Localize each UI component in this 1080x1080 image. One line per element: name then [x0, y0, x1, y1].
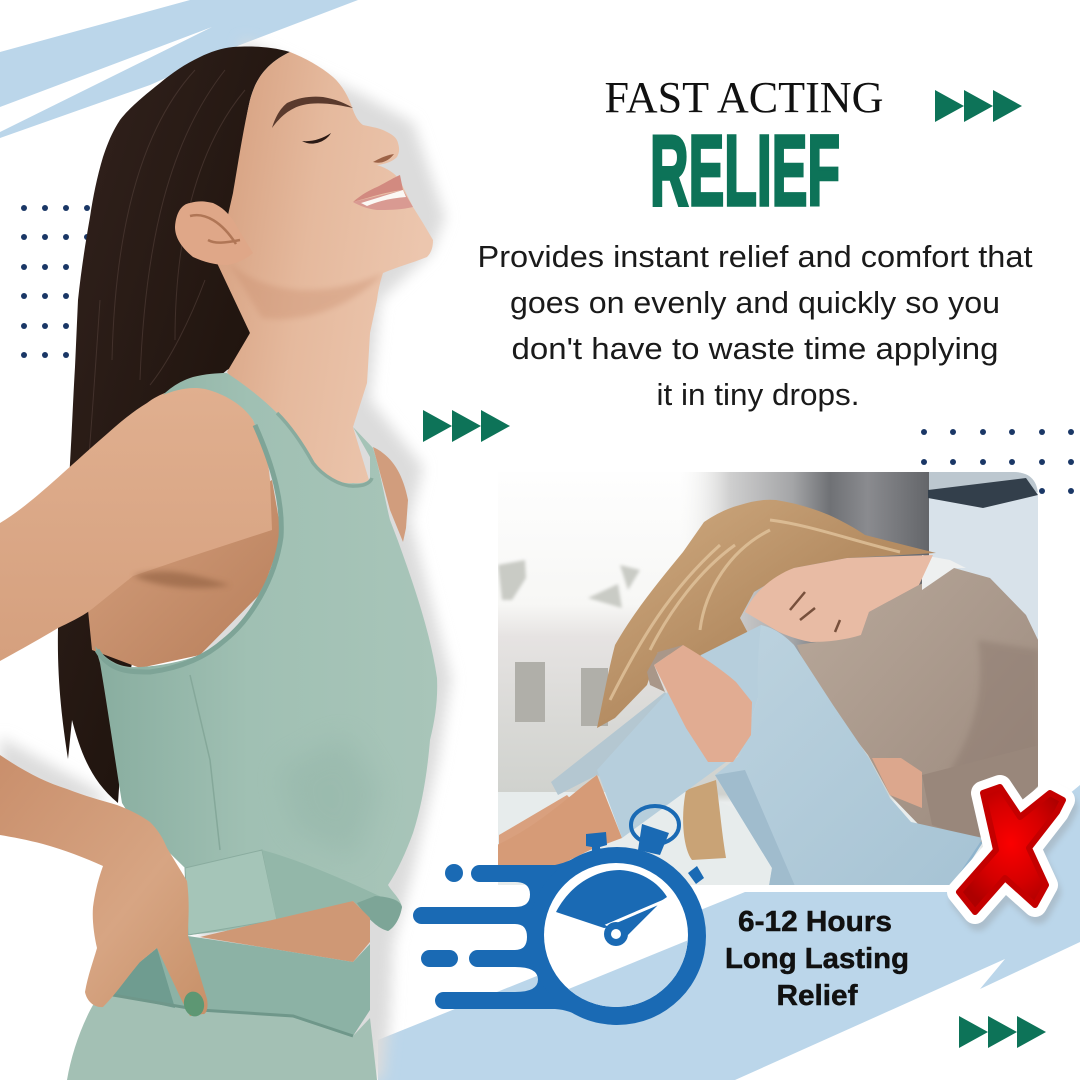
photo: woman with stomach pain	[497, 472, 1039, 890]
crown ring	[631, 806, 679, 844]
arrows: bottom	[959, 1016, 1046, 1048]
white collar	[922, 555, 966, 590]
face and neck	[217, 52, 433, 490]
window reflections	[515, 662, 608, 726]
hair tail between legs	[683, 780, 726, 860]
smiling woman in green tank top	[0, 40, 451, 1080]
waistband darker panel	[103, 948, 175, 1008]
armpit shadow	[133, 571, 230, 588]
tank knot	[357, 896, 402, 931]
ear fold	[190, 215, 240, 244]
neckline trim	[277, 413, 372, 486]
midriff	[200, 901, 370, 962]
background accent: top-left blue streak	[0, 0, 358, 138]
red X mark	[959, 787, 1066, 919]
tank fold	[262, 850, 388, 922]
right button	[688, 866, 704, 884]
speed lines	[413, 848, 620, 1025]
needle	[608, 901, 664, 937]
green nail	[182, 990, 206, 1018]
description text: Provides instant relief and comfort that	[478, 239, 1033, 274]
hair strands	[75, 70, 245, 600]
curtain	[698, 472, 929, 656]
closed eye and brow	[790, 592, 840, 632]
hair	[597, 500, 936, 728]
wall	[929, 472, 1038, 639]
nostril	[373, 154, 394, 163]
hub	[604, 922, 628, 946]
ear	[175, 201, 253, 265]
hair	[58, 47, 290, 803]
crown stem	[638, 824, 669, 855]
tank waist band	[185, 850, 277, 935]
neck and face	[745, 555, 933, 642]
description text: goes on evenly and quickly so you	[510, 285, 1000, 320]
left button	[586, 832, 607, 855]
torso skin	[88, 480, 282, 668]
far leg	[551, 692, 666, 795]
blue shirt under sweater	[958, 842, 982, 874]
dial	[544, 863, 688, 1007]
heading: FAST ACTING: FAST ACTING	[604, 73, 884, 122]
hand on knee	[654, 645, 752, 762]
jeans shadow	[715, 770, 795, 886]
tank seam	[190, 675, 220, 850]
duration text	[725, 906, 909, 1012]
right shoulder	[373, 447, 408, 542]
tank shading	[280, 735, 380, 860]
upper arm	[0, 386, 272, 661]
waistband seam	[101, 993, 353, 1036]
hand on belly	[872, 758, 922, 808]
tank top	[95, 373, 437, 935]
duration text: 6-12 Hours	[738, 906, 892, 938]
armhole trim	[97, 425, 281, 672]
upper wall	[929, 472, 1039, 492]
duration text: Relief	[776, 980, 858, 1012]
wall shelf	[928, 478, 1038, 508]
dial lower half showing blue streak	[568, 940, 688, 1007]
plants	[498, 560, 640, 608]
arm cast shadow	[0, 737, 110, 805]
arrows: top	[935, 90, 1022, 122]
eyebrow	[272, 97, 353, 128]
dot grid: left	[21, 205, 90, 358]
rear foot	[497, 775, 622, 865]
blue wedge on dial	[556, 870, 667, 928]
hair highlights	[610, 520, 900, 700]
neck shadow	[228, 262, 383, 319]
bed	[498, 792, 686, 800]
arm and hand on hip	[0, 755, 208, 1016]
sweater sleeve shading	[954, 642, 1038, 766]
leggings waistband	[103, 936, 370, 1036]
sleeve cuff	[922, 768, 1038, 830]
sweater	[797, 568, 1039, 842]
description text: don't have to waste time applying	[512, 331, 998, 366]
arrows: middle	[423, 410, 510, 442]
near thigh	[715, 625, 983, 886]
stopwatch icon	[413, 804, 706, 1025]
closed eye	[302, 133, 331, 144]
sleeve at wrist	[647, 645, 683, 692]
duration text: Long Lasting	[725, 943, 909, 975]
near shin	[597, 625, 794, 838]
leggings	[67, 994, 377, 1080]
description text	[478, 239, 1033, 412]
background accent: bottom-right blue streak	[378, 785, 1080, 1080]
case	[528, 847, 706, 1025]
description text: it in tiny drops.	[656, 377, 860, 412]
heading: RELIEF: RELIEF	[650, 115, 840, 227]
far foot	[499, 795, 569, 844]
lips and smile	[353, 175, 413, 210]
dot grid: right	[921, 429, 1074, 494]
